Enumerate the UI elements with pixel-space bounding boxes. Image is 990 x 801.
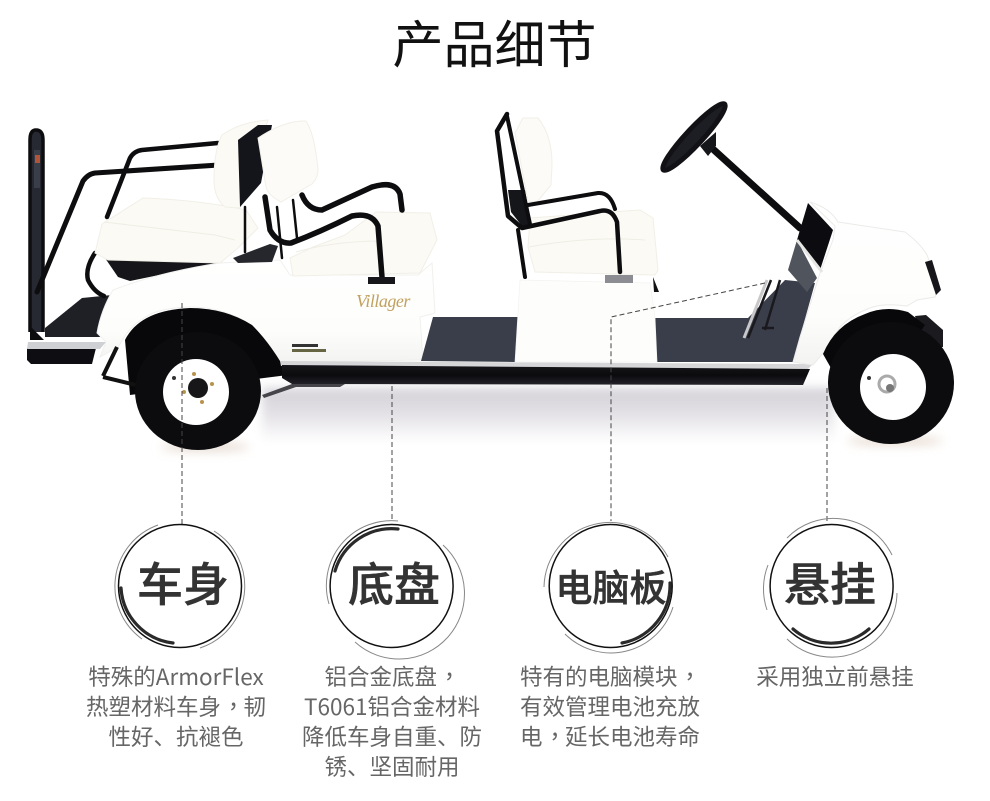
description: computer board: ， <box>684 653 707 685</box>
rear post and platform <box>30 130 250 340</box>
mid seat block <box>515 280 657 362</box>
illustration: golf cart <box>27 99 954 451</box>
rear body shell <box>97 260 435 362</box>
description: body: 特殊的ArmorFlex <box>88 660 264 692</box>
logo text: Villager <box>356 291 411 311</box>
badge: suspension: 悬挂 <box>784 559 876 611</box>
main floor mats <box>421 280 815 362</box>
ground shadow <box>161 388 943 451</box>
dashed leader: chassis <box>391 386 393 521</box>
rear bumper <box>27 342 106 364</box>
arch and chassis <box>125 308 288 395</box>
dashed leader: computer board <box>611 283 765 521</box>
small sticker <box>292 344 326 352</box>
description: computer board: ， <box>549 713 572 745</box>
front body <box>793 202 943 384</box>
badge: body: 车身 <box>137 559 229 611</box>
description: chassis: 铝合金底盘 <box>324 660 437 692</box>
dashed leader: body <box>181 303 183 524</box>
description: computer board <box>520 653 707 752</box>
description: chassis: T6061铝合金材料 <box>304 690 480 722</box>
description: body: ， <box>228 683 251 715</box>
dashed leader: suspension <box>826 388 828 521</box>
rear wheel <box>135 332 261 450</box>
title: 产品细节 <box>392 17 597 74</box>
description: computer board: 电 <box>520 720 542 752</box>
description: body: 性好、抗褪色 <box>108 720 244 752</box>
badge: chassis <box>326 521 464 659</box>
badge: body <box>115 524 245 648</box>
description: computer board: 有效管理电池充放 <box>520 690 700 722</box>
badge: suspension <box>763 518 897 657</box>
badge: computer board: 电脑板 <box>556 568 666 609</box>
middle seat <box>497 114 659 292</box>
description: body <box>86 660 266 752</box>
forward seat with frame <box>233 121 437 284</box>
badge: chassis: 底盘 <box>348 559 440 611</box>
description: body: 热塑材料车身 <box>86 690 221 722</box>
description: chassis: 降低车身自重、防 <box>302 720 482 752</box>
description: suspension: 采用独立前悬挂 <box>756 660 914 692</box>
description: computer board: 延长电池寿命 <box>565 720 700 752</box>
rear-facing seat <box>95 120 272 281</box>
front wheel <box>828 322 954 444</box>
description: chassis <box>302 653 482 782</box>
description: chassis: 锈、坚固耐用 <box>324 750 460 782</box>
badge: computer board <box>544 522 673 653</box>
description: computer board: 特有的电脑模块 <box>520 660 678 692</box>
pedal assembly <box>744 240 817 338</box>
description: chassis: ， <box>444 653 467 685</box>
side sill <box>262 361 813 398</box>
steering column and wheel <box>657 99 800 228</box>
description: body: 韧 <box>244 690 266 722</box>
